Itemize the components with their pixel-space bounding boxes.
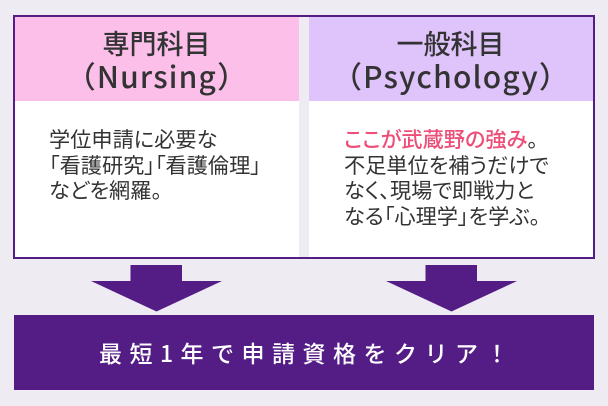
heading: specialist subjects: 専門科目 [102, 23, 210, 62]
text: specialist subjects description: 学位申請に必要な [49, 123, 217, 154]
heading: specialist subjects [15, 17, 299, 101]
text: specialist subjects description: 「看護研究」「看護倫理」 [49, 148, 261, 180]
heading: general subjects: 一般科目 [396, 23, 504, 62]
heading: general subjects [309, 17, 593, 101]
text: general subjects description: なる「心理学」を学ぶ。 [344, 200, 540, 230]
panel: general subjects body [309, 101, 593, 257]
arrow: right down arrow [386, 265, 517, 312]
heading: general subjects: （Psychology） [332, 53, 570, 97]
panel: specialist subjects body [15, 101, 299, 257]
heading: specialist subjects: （Nursing） [66, 53, 248, 97]
text: general subjects description [344, 123, 549, 230]
banner: result [14, 315, 594, 390]
text: general subjects description: ここが武蔵野の強み。 [344, 123, 538, 154]
panel: comparison frame [13, 15, 595, 259]
text: specialist subjects description [49, 123, 261, 205]
text: general subjects description: なく、現場で即戦力と [344, 174, 534, 205]
text: general subjects description: 不足単位を補うだけで [344, 148, 549, 180]
text: specialist subjects description: などを網羅。 [49, 174, 162, 205]
arrow: left down arrow [91, 265, 222, 312]
banner: result: 最短1年で申請資格をクリア！ [99, 335, 516, 369]
